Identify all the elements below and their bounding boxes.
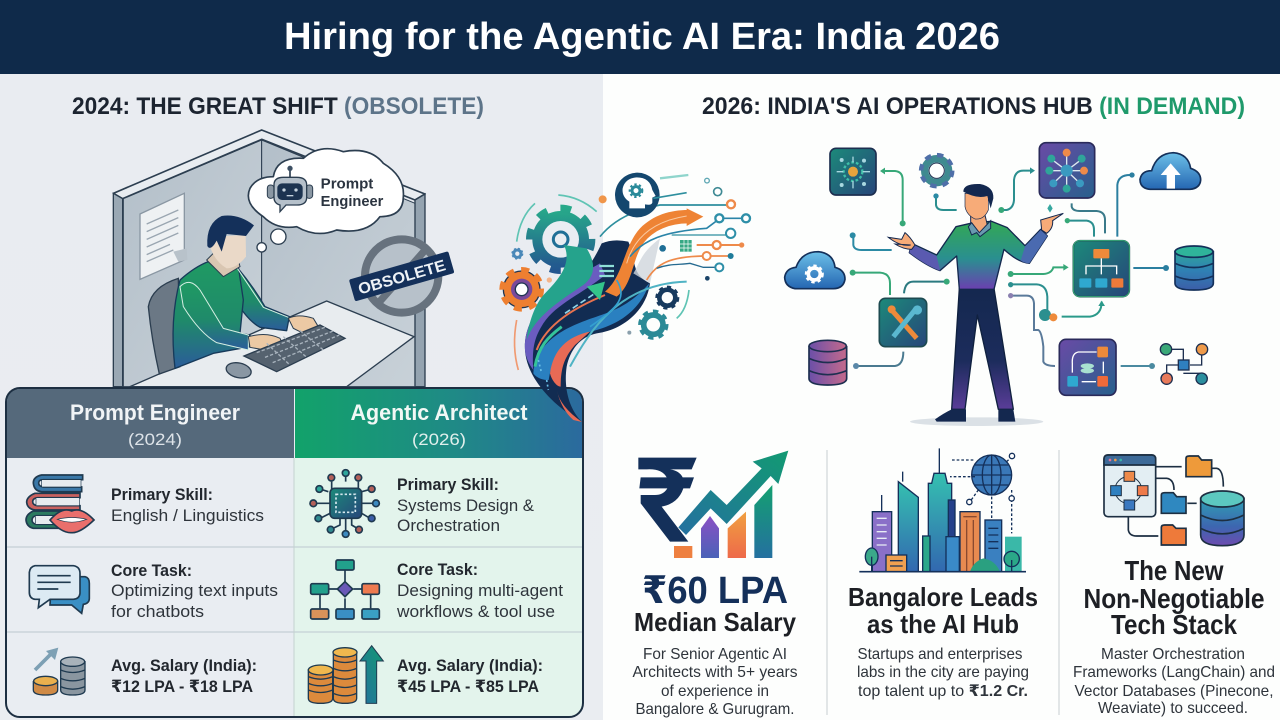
row: core task prompt engineer: for chatbots: [111, 602, 204, 621]
row: salary prompt engineer: [111, 656, 257, 696]
row: primary skill agentic architect: Primary Skill:: [397, 475, 499, 494]
row: primary skill agentic architect: [397, 475, 535, 535]
row: primary skill agentic architect: Orchestration: [397, 516, 500, 535]
panel: new tech stack: [1073, 455, 1275, 717]
row: core task agentic architect: Core Task:: [397, 560, 478, 579]
row: primary skill prompt engineer: [111, 485, 264, 525]
icon: books and lips: [26, 475, 94, 533]
database blue: [1175, 246, 1213, 290]
column header: prompt engineer: (2024): [128, 430, 182, 449]
column header: agentic architect: [350, 400, 528, 449]
panel: median salary: Median Salary: [634, 607, 796, 637]
navy gear small: [657, 287, 678, 308]
orange gear: [502, 270, 541, 309]
title banner: Hiring for the Agentic AI Era: India 2026: [284, 16, 1000, 58]
panel: Bangalore AI hub: Bangalore Leads: [848, 582, 1038, 612]
icon: coin stacks with up arrow: [308, 646, 383, 703]
panel: new tech stack: Weaviate) to succeed.: [1098, 700, 1248, 717]
panel: median salary: ₹60 LPA: [642, 570, 788, 612]
row: core task prompt engineer: Core Task:: [111, 561, 192, 580]
teal gear: [530, 209, 591, 270]
column header: agentic architect: Agentic Architect: [350, 400, 528, 425]
panel: Bangalore AI hub: as the AI Hub: [867, 609, 1019, 639]
comparison table: [6, 388, 583, 717]
divider decoration: [826, 450, 828, 715]
icon: small coins with arrow: [33, 648, 85, 695]
column header: agentic architect: (2026): [412, 430, 466, 449]
circuit nodes: [547, 175, 750, 335]
panel: median salary: [632, 451, 798, 718]
tile: agent network: [830, 148, 876, 195]
panel: new tech stack: Master Orchestration: [1101, 646, 1245, 663]
row: salary agentic architect: ₹45 LPA - ₹85 LPA: [397, 677, 539, 696]
row: salary agentic architect: [397, 656, 543, 696]
pinned paper: [140, 193, 187, 279]
title banner: [0, 0, 1280, 74]
row: core task agentic architect: Designing multi-agent: [397, 581, 563, 600]
panel: median salary: Bangalore & Gurugram.: [636, 701, 794, 718]
panel: median salary: For Senior Agentic AI: [643, 646, 787, 663]
desk: [130, 301, 414, 387]
tile: data flow: [1059, 339, 1116, 395]
thought bubble: Prompt: [321, 176, 373, 192]
head with gear icon: [615, 173, 660, 217]
chair: [148, 278, 180, 374]
ground shadow: [910, 417, 1043, 426]
swirling ribbons: [515, 195, 747, 422]
right background panel: [603, 74, 1280, 720]
row: core task prompt engineer: Optimizing text inputs: [111, 581, 278, 600]
icon: workflow diagram: [311, 560, 379, 619]
no symbol with obsolete banner: OBSOLETE: [356, 257, 448, 298]
panel: Bangalore AI hub: Startups and enterprises: [858, 646, 1022, 663]
illustration: transformation swirl with gears: [502, 173, 750, 422]
blue gear tiny: [512, 249, 522, 259]
small orange teal agent icon: [1039, 309, 1057, 321]
icon: chat bubbles: [29, 566, 89, 613]
illustration: obsolete prompt engineer in cubicle: [113, 130, 454, 387]
seated person: [173, 216, 319, 368]
connector lines: [850, 167, 1169, 369]
robot icon: [267, 166, 313, 212]
panel: Bangalore AI hub: [848, 448, 1038, 700]
row: salary prompt engineer: ₹12 LPA - ₹18 LPA: [111, 677, 253, 696]
row: primary skill agentic architect: Systems Design &: [397, 496, 535, 515]
icon: chip with circuit nodes: [310, 470, 379, 537]
panel: median salary: Architects with 5+ years: [632, 664, 798, 681]
panel: Bangalore AI hub: top talent up to ₹1.2 Cr.: [858, 683, 1028, 700]
thought bubble: Engineer: [321, 194, 384, 210]
panel: new tech stack: The New: [1124, 555, 1224, 586]
row: primary skill prompt engineer: English / Linguistics: [111, 506, 264, 525]
icon: orchestration window, folders, database: [1104, 455, 1244, 546]
panel: new tech stack: Frameworks (LangChain) and: [1073, 664, 1275, 681]
row: salary agentic architect: Avg. Salary (India):: [397, 656, 543, 675]
mouse: [225, 361, 253, 380]
row: primary skill prompt engineer: Primary Skill:: [111, 485, 213, 504]
tile: hub and spokes: [1039, 143, 1095, 198]
panel: median salary: of experience in: [661, 683, 769, 700]
panel: new tech stack: Vector Databases (Pinecone,: [1074, 683, 1274, 700]
standing person: [888, 184, 1063, 422]
flow graph icon: [1160, 344, 1208, 384]
keyboard: [244, 325, 345, 372]
column header: prompt engineer: Prompt Engineer: [70, 400, 240, 425]
tile: org chart: [1073, 241, 1129, 297]
panel: Bangalore AI hub: labs in the city are paying: [857, 664, 1029, 681]
no symbol with obsolete banner: [349, 239, 454, 313]
icon: city skyline with globe: [859, 448, 1026, 572]
row: core task agentic architect: workflows & tool use: [396, 602, 555, 621]
cloud gear icon: [785, 252, 845, 289]
gear icon: [921, 155, 952, 186]
teal gear small: [640, 311, 667, 338]
row: salary prompt engineer: Avg. Salary (India):: [111, 656, 257, 675]
panel: new tech stack: Tech Stack: [1111, 609, 1237, 640]
thought bubble: [248, 149, 403, 252]
icon: rupee with rising chart: [638, 451, 788, 558]
database purple: [809, 340, 847, 385]
tile: tools: [879, 298, 927, 347]
heading: 2026 India's AI operations hub: 2026: INDIA'S AI OPERATIONS HUB (IN DEMAND): [702, 93, 1245, 120]
cloud upload icon: [1140, 153, 1201, 189]
left background panel: [0, 74, 603, 720]
column header: prompt engineer: [70, 400, 240, 449]
row: core task agentic architect: [396, 560, 563, 621]
heading: 2024 the great shift: 2024: THE GREAT SHIFT (OBSOLETE): [72, 93, 484, 120]
row: core task prompt engineer: [111, 561, 278, 621]
illustration: architect with systems diagram: [785, 143, 1213, 426]
